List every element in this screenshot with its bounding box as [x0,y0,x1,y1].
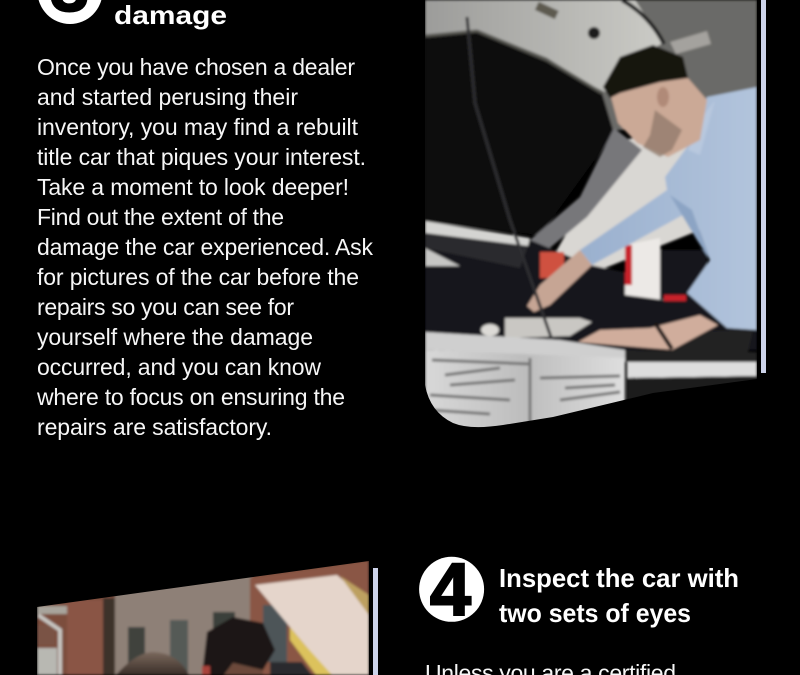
section 3 number badge [38,0,102,27]
section 3 body text: inventory, you may find a rebuilt [37,114,359,140]
shirt torso and arm [580,87,757,330]
engine bay [425,240,757,352]
engine cover parts [505,318,592,338]
section 3 body text [36,54,374,440]
hood underside [425,30,614,235]
section 3 body text: Once you have chosen a dealer [37,54,355,80]
raised car hood [255,575,369,675]
section 3 body text: where to focus on ensuring the [36,384,345,410]
section 3 body text: occurred, and you can know [37,354,321,380]
hanging rear panel [672,330,752,353]
photo: two men in front of brick building and raised hood [37,555,369,675]
hood strut panel [530,128,642,262]
section 3 body text: Take a moment to look deeper! [37,174,349,200]
pale stone wall [115,575,262,675]
garage ceiling [598,0,757,132]
bald head [116,652,189,675]
section 3 body text: damage the car experienced. Ask [37,234,374,260]
accent bar beside mechanic photo [761,0,766,373]
car edge [270,662,312,675]
section 3 heading: damage [114,0,227,30]
face [224,663,263,675]
section 3 body text: title car that piques your interest. [37,144,366,170]
beard [643,110,682,157]
accent bar beside second photo [373,568,378,675]
brick right [250,561,369,675]
section 4 heading: two sets of eyes [499,598,691,628]
bracelet [655,323,672,349]
brick pier [67,600,103,675]
bright background behind man [554,136,694,270]
hood inner lip [425,31,602,93]
ear [657,87,669,107]
photo: man inspecting engine under raised hood [425,0,757,440]
section 3 body text: repairs are satisfactory. [37,414,272,440]
forearm right [578,315,718,350]
ceiling vent [670,31,711,54]
ear [202,666,210,675]
prop rod [467,17,552,340]
section 4 number badge: 4 [430,548,471,631]
section 3 body text: yourself where the damage [37,324,313,350]
section 3 body text: for pictures of the car before the [37,264,359,290]
windows [128,627,145,675]
section 4 number badge [419,548,484,631]
collar [689,107,712,154]
drain pipe [38,615,60,675]
headlight [425,348,628,428]
section 3 body text: repairs so you can see for [37,294,294,320]
raised hood frame [425,0,663,92]
section 3 body text: Find out the extent of the [37,204,284,230]
face [610,77,707,157]
hair [603,45,688,98]
section 3 body text: and started perusing their [37,84,298,110]
dark haired head [202,617,275,675]
brick building [37,555,369,675]
hood sticker [535,2,559,19]
section 4 heading: Inspect the car with [499,563,739,593]
forearm left [527,250,592,312]
red and white background pieces [540,252,564,278]
bumper and trim [425,332,625,360]
section 4 heading [499,563,739,628]
